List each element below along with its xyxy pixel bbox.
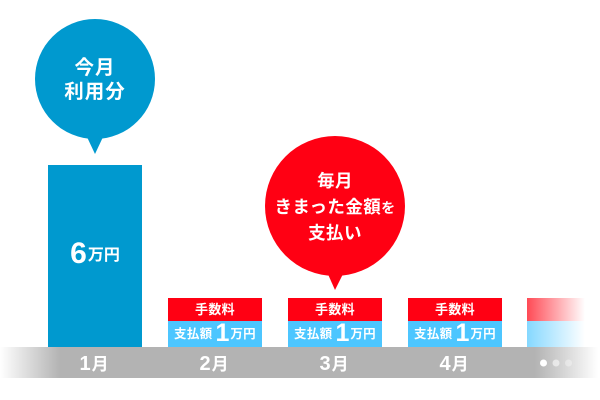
fading payment box	[527, 321, 585, 347]
March payment box	[288, 321, 382, 347]
continuation dots	[540, 360, 572, 366]
March fee label: 手数料	[315, 302, 355, 317]
April fee box	[408, 298, 502, 321]
bubble text: fixed monthly payment	[274, 171, 396, 243]
March payment label: 支払額1万円	[294, 319, 376, 347]
timeline band	[0, 347, 600, 378]
month label: March: 3月	[319, 353, 349, 375]
bubble: fixed monthly payment	[265, 136, 405, 290]
April payment box	[408, 321, 502, 347]
bubble text: this month's usage	[64, 57, 126, 102]
bubble text: this month's usage: 今月	[74, 57, 116, 79]
February fee box	[168, 298, 262, 321]
February payment label: 支払額1万円	[174, 319, 256, 347]
April payment label: 支払額1万円	[414, 319, 496, 347]
bubble text: fixed monthly payment: 支払い	[308, 223, 362, 243]
fading fee box	[527, 298, 585, 321]
month label: February: 2月	[199, 353, 229, 375]
bubble text: fixed monthly payment: きまった金額を	[274, 196, 396, 216]
February payment box	[168, 321, 262, 347]
April fee label: 手数料	[435, 302, 475, 317]
March fee box	[288, 298, 382, 321]
bar label: 6万円: 6万円	[70, 237, 120, 270]
bubble text: this month's usage: 利用分	[64, 80, 126, 102]
month label: January: 1月	[79, 353, 109, 375]
bubble: this month's usage	[35, 19, 155, 154]
February fee label: 手数料	[195, 302, 235, 317]
month label: April: 4月	[439, 353, 469, 375]
bar: January 60,000 yen	[48, 165, 142, 347]
bubble text: fixed monthly payment: 毎月	[317, 171, 353, 191]
